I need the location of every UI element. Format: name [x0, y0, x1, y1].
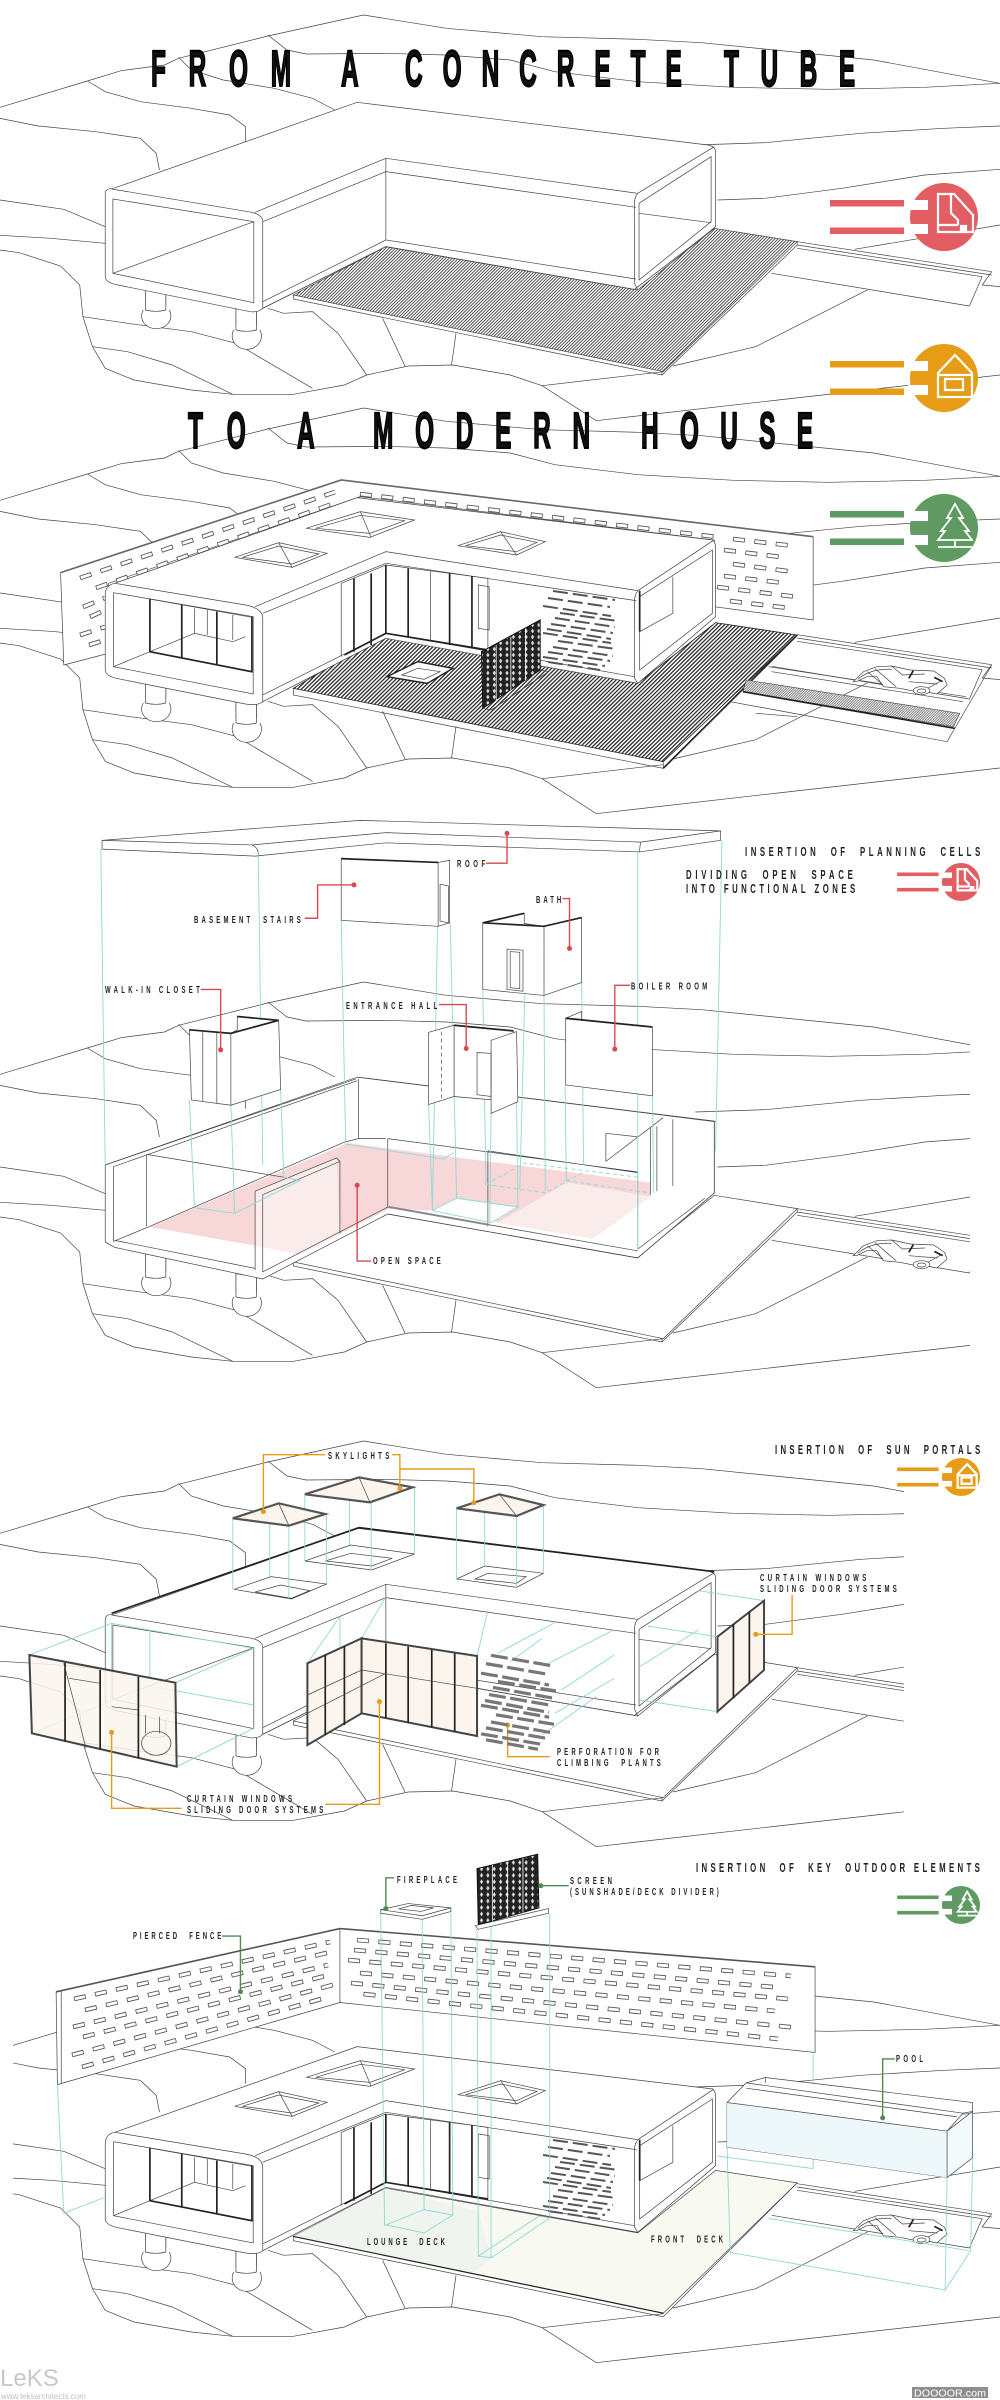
cell: boiler room: [566, 1012, 652, 1096]
logo: LeKS architects: [0, 2365, 86, 2400]
panel: insertion of sun portals: [0, 1441, 1000, 1847]
perforation for climbing plants: [481, 1655, 556, 1749]
title: from a concrete tube: CONCRETE: [405, 41, 682, 97]
terrain lines: [0, 1441, 1000, 1847]
fireplace: [381, 1904, 453, 2233]
labels: sun portals: SLIDING DOOR SYSTEMS: [187, 1805, 324, 1815]
icon: outdoor elements plug small: [897, 1886, 980, 1924]
labels: sun portals: SKYLIGHTS: [328, 1451, 390, 1461]
pierced fence body: [56, 1929, 815, 2085]
icon: outdoor elements plug: [830, 494, 978, 562]
labels: sun portals: CURTAIN WINDOWS: [760, 1573, 867, 1583]
roof slab: [102, 820, 721, 856]
text: dividing open space: DIVIDING OPEN SPACE: [686, 868, 853, 883]
labels: sun portals: CLIMBING PLANTS: [557, 1758, 661, 1768]
text: dividing open space: INTO FUNCTIONAL ZONES: [686, 882, 855, 897]
labels: sun portals: PERFORATION FOR: [557, 1747, 659, 1757]
curtain window left: [29, 1623, 254, 1767]
labels: sun portals: CURTAIN WINDOWS: [187, 1794, 292, 1804]
tube house on stilts with hatched deck: [105, 102, 797, 375]
callouts: [222, 1878, 895, 2118]
heading: insertion of key outdoor elements: INSERTION OF KEY OUTDOOR ELEMENTS: [696, 1861, 980, 1876]
perforation on house wall: [543, 2140, 618, 2219]
perforation for climbing plants: [543, 591, 618, 670]
screen: [482, 620, 548, 710]
labels: outdoor elements: LOUNGE DECK: [367, 2237, 445, 2247]
house and deck: [105, 2047, 797, 2317]
outdoor elements: [57, 1854, 973, 2290]
callouts: [201, 833, 630, 1261]
panel: concrete tube: [0, 15, 1000, 421]
labels: outdoor elements: [133, 1875, 923, 2247]
heading: insertion of planning cells: INSERTION OF PLANNING CELLS: [745, 845, 980, 860]
icon: sun portals plug small: [897, 1458, 980, 1496]
labels: outdoor elements: PIERCED FENCE: [133, 1931, 222, 1941]
labels: planning cells: OPEN SPACE: [373, 1256, 441, 1266]
road, car and pool: [730, 665, 992, 742]
labels: outdoor elements: FRONT DECK: [651, 2234, 723, 2245]
fireplace on deck: [387, 662, 453, 683]
labels: planning cells: BATH: [536, 895, 561, 905]
labels: planning cells: ENTRANCE HALL: [346, 1001, 437, 1011]
terrain lines: [0, 15, 1000, 421]
exploded floor plan and cells: [101, 820, 722, 1279]
title: from a concrete tube: A: [341, 41, 359, 97]
title: to a modern house: A: [297, 403, 315, 459]
panel: modern house: [0, 403, 1000, 814]
title: to a modern house: HOUSE: [641, 403, 813, 459]
terrain lines: [0, 982, 1000, 1388]
text: dividing open space: [686, 868, 855, 897]
labels: planning cells: ROOF: [457, 859, 485, 869]
skylights exploded: [233, 1477, 543, 1599]
curtain window right: [640, 1591, 764, 1712]
cell: entrance hall: [429, 1025, 518, 1113]
cell: walk-in closet: [189, 1016, 281, 1105]
icon: planning cells plug small: [897, 863, 980, 901]
watermark: DOOOOR.com: DOOOOR.com: [914, 2388, 986, 2400]
sun portal components: [29, 1455, 792, 1808]
cell: bath: [483, 913, 582, 995]
labels: outdoor elements: FIREPLACE: [397, 1875, 457, 1885]
icon: sun portals plug: [830, 344, 978, 412]
house with deck, skylights, windows: [105, 498, 797, 768]
open space floor: [150, 1143, 651, 1254]
labels: outdoor elements: (SUNSHADE/DECK DIVIDER): [570, 1887, 719, 1897]
title: to a modern house: [188, 403, 813, 459]
labels: sun portals: [187, 1451, 897, 1815]
pool: [717, 2077, 973, 2290]
labels: outdoor elements: POOL: [896, 2054, 923, 2064]
labels: planning cells: BASEMENT STAIRS: [194, 915, 301, 925]
callouts: [112, 1455, 792, 1808]
title: from a concrete tube: TUBE: [724, 41, 855, 97]
labels: planning cells: [105, 859, 707, 1266]
pierced fence: [61, 480, 813, 665]
title: to a modern house: MODERN: [373, 403, 590, 459]
title: from a concrete tube: [151, 41, 855, 97]
screen: [475, 1854, 550, 2258]
terrain lines: [13, 1996, 1000, 2363]
title: to a modern house: TO: [188, 403, 246, 459]
pierced fence slots: [72, 1940, 794, 2067]
curtain window courtyard: [307, 1597, 488, 1745]
heading: insertion of sun portals: INSERTION OF SUN PORTALS: [775, 1443, 980, 1458]
labels: planning cells: WALK-IN CLOSET: [105, 985, 200, 995]
projection lines: [101, 840, 722, 1249]
cell: basement stairs: [341, 859, 450, 926]
title: from a concrete tube: FROM: [151, 41, 291, 97]
terrain lines: [0, 408, 1000, 814]
logo: LeKS architects: LeKS: [0, 2365, 59, 2392]
perforation guides: [497, 1623, 614, 1735]
icon: planning cells plug: [830, 183, 978, 251]
labels: planning cells: BOILER ROOM: [631, 981, 707, 992]
labels: outdoor elements: SCREEN: [570, 1876, 612, 1886]
labels: sun portals: SLIDING DOOR SYSTEMS: [760, 1584, 897, 1594]
panel: insertion of planning cells: [0, 820, 1000, 1388]
panel: insertion of key outdoor elements: [0, 1854, 1000, 2363]
